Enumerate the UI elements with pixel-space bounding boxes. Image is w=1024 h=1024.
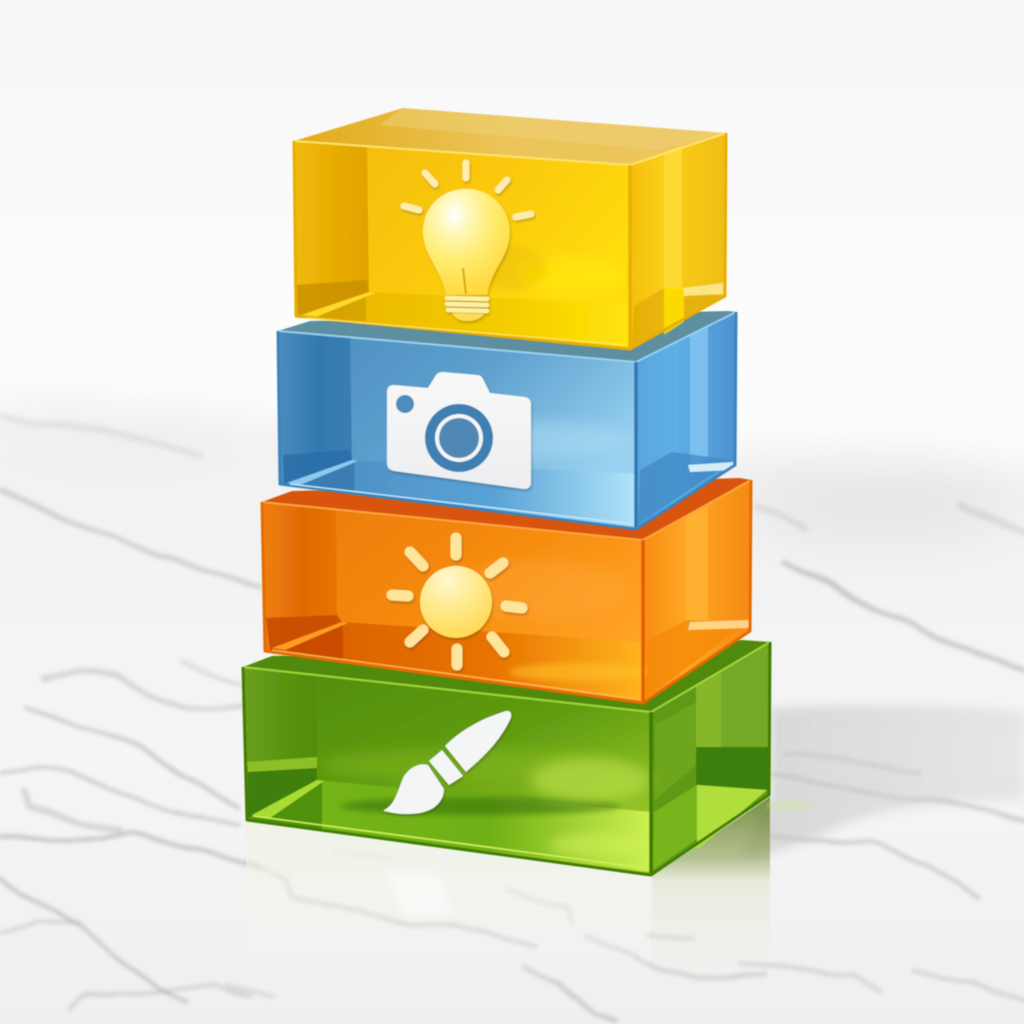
- marble table: [0, 340, 1024, 1024]
- cast shadow: [740, 705, 1024, 858]
- table tone patches: [740, 465, 1020, 545]
- bright reflection patch: [385, 872, 452, 915]
- block: green with paintbrush: [243, 640, 770, 875]
- block: blue with camera: [278, 311, 736, 529]
- block: yellow with light bulb: [294, 108, 726, 349]
- marble veins: [0, 415, 1024, 1024]
- icon: sun: [392, 538, 522, 665]
- icon: paintbrush: [384, 711, 511, 814]
- icon: light bulb: [404, 163, 531, 321]
- icon: camera: [387, 372, 531, 489]
- block reflection on table: [246, 822, 650, 1024]
- side reflection: [652, 797, 770, 1000]
- green light cast: [766, 801, 814, 809]
- block: orange with sun: [262, 478, 751, 703]
